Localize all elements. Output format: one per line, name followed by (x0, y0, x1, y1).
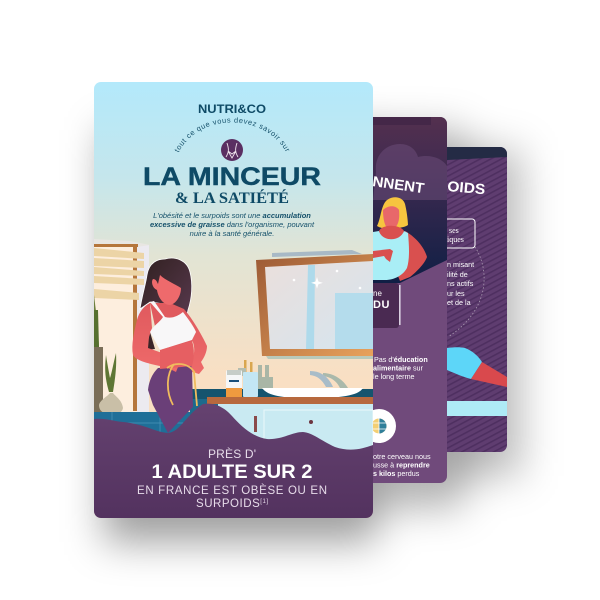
plant and vases (94, 295, 123, 417)
title: LA MINCEUR (143, 163, 321, 191)
mirror (256, 250, 373, 359)
infographic stack of three cards (78, 82, 544, 568)
paragraph fragment: ns actifs (447, 279, 474, 288)
intro paragraph: L'obésité et le surpoids sont une accumulation (153, 211, 311, 220)
banner statistic: 1 ADULTE SUR 2 (152, 461, 313, 483)
intro paragraph: excessive de graisse dans l'organisme, pouvant (150, 220, 315, 229)
dashed circle (448, 247, 484, 337)
paragraph fragment: n misant (447, 260, 474, 269)
paragraph: education: alimentaire sur (373, 364, 424, 372)
paragraph fragment: et de la (447, 298, 471, 307)
result box: ne (373, 289, 382, 298)
intro paragraph: nuire à la santé générale. (190, 229, 274, 238)
result box: DU (373, 299, 390, 311)
outlined label (447, 218, 476, 248)
intro paragraph (150, 211, 315, 238)
banner statistic: [1] (260, 499, 268, 505)
result box (373, 283, 401, 328)
icon: brain (373, 409, 396, 443)
front card: la minceur (94, 82, 373, 518)
icon: waist badge (221, 139, 243, 161)
paragraph fragment (447, 260, 474, 307)
dark panel (373, 117, 447, 283)
illustration: stretching leg (447, 347, 507, 387)
countertop (207, 397, 373, 404)
header tab (373, 117, 431, 125)
paragraph: education (373, 355, 428, 381)
cloud shape (373, 144, 447, 200)
banner statistic (137, 446, 327, 510)
card header band (447, 147, 507, 160)
paragraph fragment: ilité de (447, 270, 468, 279)
banner statistic: PRÈS D' (208, 446, 256, 461)
drop shadow (104, 130, 521, 542)
paragraph fragment: ur les (447, 289, 465, 298)
scene background (94, 82, 373, 518)
back splash (190, 389, 373, 414)
banner statistic: EN FRANCE EST OBÈSE OU EN (137, 484, 327, 497)
paragraph: brain: usse à reprendre (373, 460, 430, 470)
paragraph: brain: s kilos perdus (373, 469, 420, 478)
purple wave banner (94, 404, 373, 518)
middle card: why diets fail (373, 117, 447, 483)
floor tiles (94, 412, 190, 433)
illustration: woman thumbs down (373, 197, 427, 281)
paragraph: education: Pas d'éducation (374, 355, 428, 364)
arched tagline: tout ce que vous devez savoir sur (174, 117, 290, 152)
light blue bar (447, 401, 507, 416)
cabinet (218, 404, 373, 454)
subtitle: & LA SATIÉTÉ (175, 190, 289, 207)
outlined label: ses (449, 226, 459, 235)
paragraph: brain (373, 454, 430, 478)
banner statistic: SURPOIDS (196, 498, 260, 510)
sink and faucet (262, 371, 363, 398)
logo: NUTRI&CO (198, 104, 266, 116)
outlined label: iques (447, 235, 464, 244)
back card: overweight article (447, 147, 507, 452)
heading fragment: OIDS (447, 179, 486, 198)
window with blinds (94, 239, 150, 416)
paragraph: education: le long terme (373, 372, 415, 381)
toiletries (226, 360, 273, 397)
heading fragment: NNENT (371, 174, 425, 197)
paragraph: brain: otre cerveau nous (373, 452, 431, 461)
illustration: woman with measuring tape (132, 258, 207, 433)
